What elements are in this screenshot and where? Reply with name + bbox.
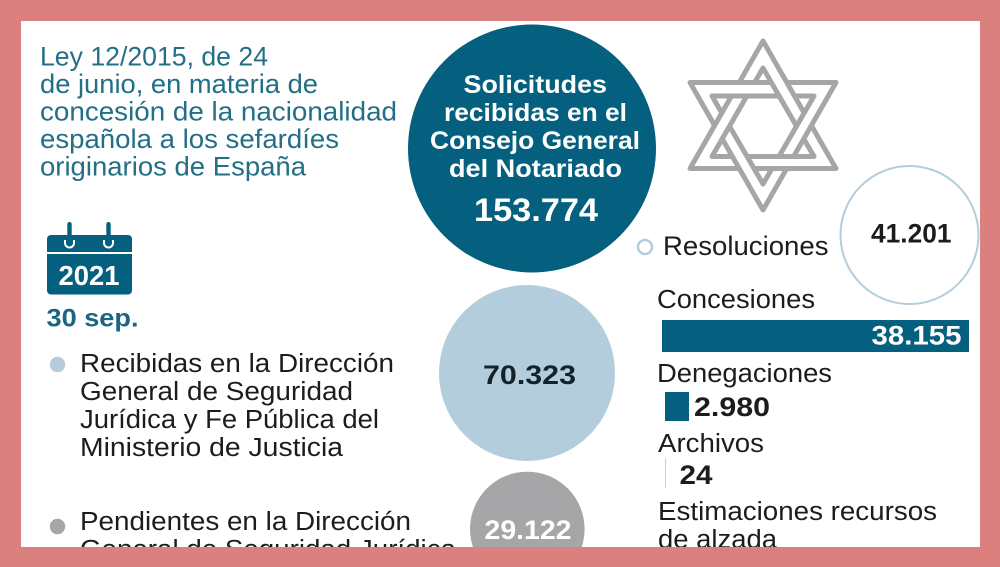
main circle: solicitudes recibidas: del Notariado (449, 155, 622, 183)
main circle: solicitudes recibidas: Solicitudes (464, 71, 607, 99)
heading: law description: concesión de la nacionalidad (40, 96, 397, 126)
main circle: solicitudes recibidas: recibidas en el (444, 99, 627, 127)
legend: recibidas en la Dirección General: General de Seguridad (80, 378, 353, 406)
main circle: solicitudes recibidas (408, 24, 656, 272)
date: 30 sep.: 30 sep. (46, 304, 138, 332)
circle: 29.122: 29.122 (484, 515, 572, 545)
label: estimaciones recursos de alzada (659, 501, 936, 547)
heading: law description (40, 42, 397, 182)
circle: 29.122 (470, 472, 585, 547)
icon: star of David (690, 41, 836, 210)
heading: law description: Ley 12/2015, de 24 (40, 42, 268, 72)
circle: 70.323: 70.323 (483, 360, 576, 390)
legend: recibidas en la Dirección General: Jurídica y Fe Pública del (80, 406, 379, 434)
bar: denegaciones: 2.980 (694, 392, 770, 422)
bar: concesiones (657, 286, 969, 352)
legend: resoluciones (636, 236, 828, 256)
legend: pendientes en la Dirección General: Pendientes en la Dirección (80, 508, 411, 536)
bar: denegaciones: Denegaciones (657, 360, 832, 388)
legend: pendientes en la Dirección General: General de Seguridad Jurídica (80, 536, 457, 564)
main circle: solicitudes recibidas: Consejo General (430, 127, 640, 155)
bar: concesiones: Concesiones (657, 286, 815, 314)
legend: recibidas en la Dirección General (50, 350, 394, 462)
heading: law description: de junio, en materia de (40, 69, 318, 99)
label: estimaciones recursos de alzada: de alzada (658, 526, 778, 554)
bar: archivos (658, 430, 764, 490)
main circle: solicitudes recibidas: 153.774 (474, 192, 598, 228)
legend: resoluciones: Resoluciones (663, 231, 828, 261)
legend: recibidas en la Dirección General: Ministerio de Justicia (80, 434, 344, 462)
bar chart: resoluciones breakdown (657, 286, 969, 554)
label: estimaciones recursos de alzada: Estimaciones recursos (658, 498, 937, 526)
bar: denegaciones (657, 360, 832, 422)
calendar icon: 2021 (47, 222, 132, 294)
circle: 41.201: 41.201 (871, 218, 952, 248)
heading: law description: española a los sefardíes (40, 124, 339, 154)
bar: archivos: 24 (680, 460, 712, 490)
calendar icon: 2021: 2021 (58, 260, 120, 291)
bar: archivos: Archivos (658, 430, 764, 458)
legend: recibidas en la Dirección General: Recibidas en la Dirección (80, 350, 394, 378)
bar: concesiones: 38.155 (872, 320, 962, 350)
circle: 41.201 (840, 166, 978, 304)
heading: law description: originarios de España (40, 152, 306, 182)
legend: pendientes en la Dirección General (50, 510, 454, 547)
circle: 70.323 (439, 285, 615, 461)
